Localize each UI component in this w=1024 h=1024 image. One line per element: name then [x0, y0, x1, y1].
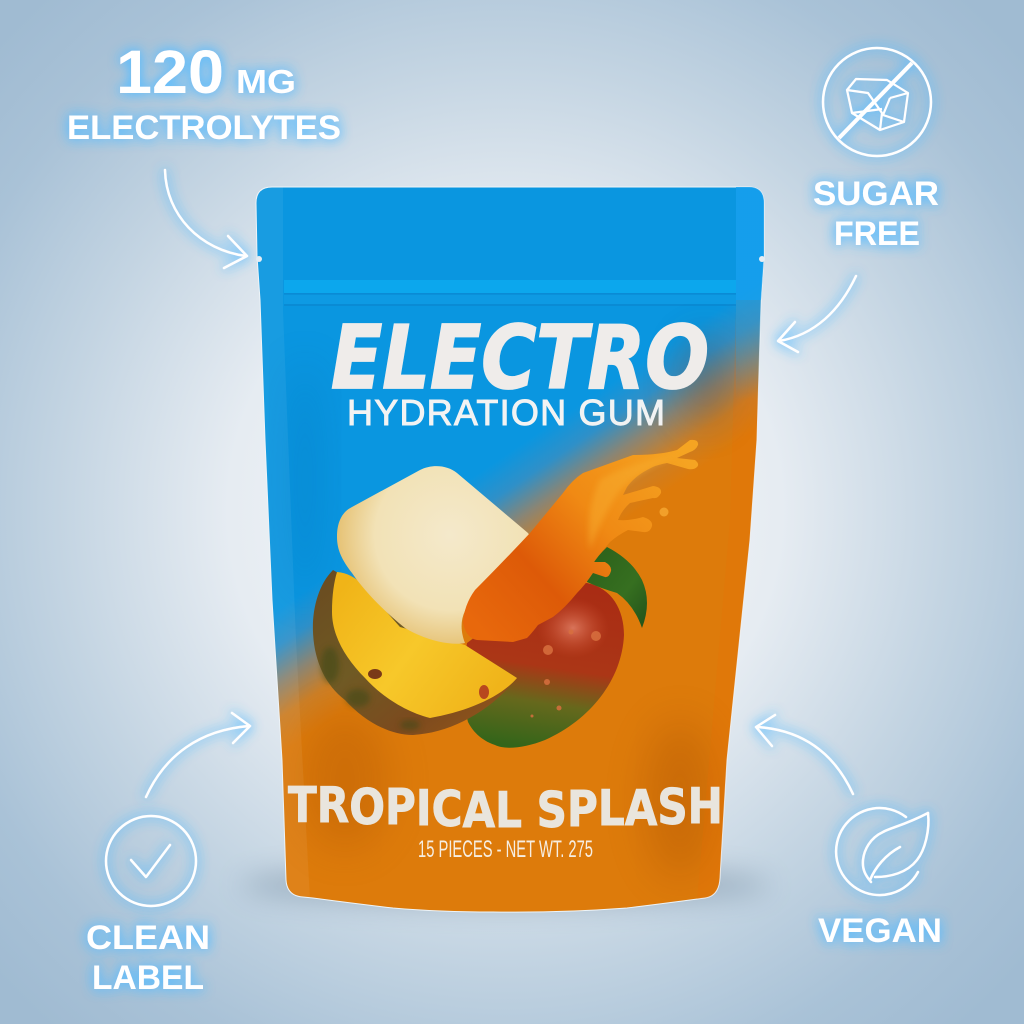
label: clean label: LABEL — [92, 959, 204, 997]
arrow: clean label to pouch — [146, 713, 250, 797]
mango — [460, 583, 624, 748]
flesh — [332, 572, 517, 718]
arrow: vegan to pouch — [756, 715, 853, 794]
zip seal — [284, 280, 736, 306]
icon: check mark circle — [106, 816, 196, 906]
net weight: 15 PIECES - NET WT. 275 — [418, 836, 593, 863]
label: sugar free: SUGAR — [813, 175, 939, 213]
label: vegan: VEGAN — [818, 912, 942, 950]
label: sugar free: FREE — [834, 215, 920, 253]
tear notches — [256, 256, 765, 262]
skin blemishes — [321, 647, 420, 730]
callout: electrolytes: 120 — [116, 38, 224, 106]
mango droplets — [530, 630, 601, 718]
callout: electrolytes: ELECTROLYTES — [67, 109, 341, 147]
icon: no sugar cube — [823, 48, 931, 156]
juice highlights — [589, 455, 680, 550]
gum piece — [337, 466, 530, 644]
callout: electrolytes: MG — [236, 63, 296, 100]
flavor name: TROPICAL SPLASH — [288, 777, 723, 839]
pouch body — [256, 187, 764, 912]
icon: leaf — [836, 808, 928, 895]
label: clean label — [86, 919, 210, 997]
subtitle: HYDRATION GUM — [347, 392, 665, 433]
pouch folds and side gussets — [250, 180, 770, 900]
arrow: electrolytes to pouch — [165, 170, 247, 268]
juice splash — [463, 440, 698, 642]
arrow: sugar free to pouch — [778, 276, 856, 352]
product pouch — [250, 180, 770, 912]
mango highlight — [537, 598, 609, 658]
callout: electrolytes — [67, 38, 341, 147]
mango slice — [313, 570, 517, 735]
label: sugar free — [813, 175, 939, 253]
label: clean label: CLEAN — [86, 919, 210, 957]
pouch shadow — [240, 865, 770, 905]
flesh spots — [368, 669, 489, 699]
illustration: fruit and gum — [313, 440, 698, 748]
juice droplet — [660, 508, 668, 516]
brand title: ELECTRO — [331, 307, 709, 409]
leaf — [587, 547, 647, 628]
